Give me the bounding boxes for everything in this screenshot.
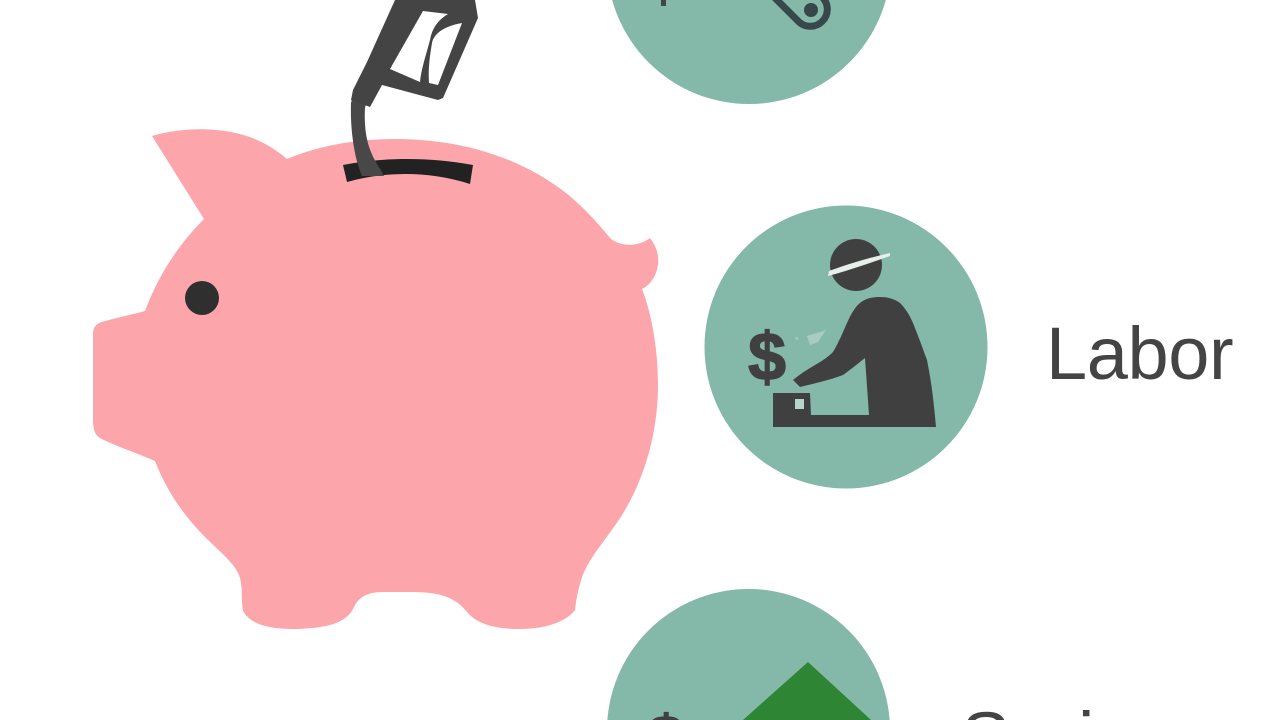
cap band [828, 253, 890, 276]
circle [607, 589, 890, 720]
hose [351, 95, 384, 176]
circle [607, 0, 891, 104]
label: Labor: Labor [1046, 312, 1233, 395]
panel: savings circle [607, 589, 890, 720]
body [773, 297, 936, 427]
panel: tools circle [607, 0, 891, 104]
icon: wrench [772, 0, 827, 26]
dollar sign: $ [748, 319, 786, 395]
coin slot [343, 159, 473, 184]
piggy bank [93, 129, 658, 629]
pig body [93, 129, 658, 629]
icon: tool handle tip [661, 0, 666, 6]
circle [704, 206, 988, 488]
nozzle handle [351, 0, 478, 107]
sparkles [794, 330, 826, 345]
eye [185, 281, 219, 315]
icon: fuel pump nozzle [351, 0, 478, 176]
icon: green house roof [743, 662, 871, 720]
icon: worker at cash register [748, 239, 936, 427]
panel: labor circle [704, 206, 988, 488]
head [830, 239, 882, 291]
register button [795, 399, 804, 409]
